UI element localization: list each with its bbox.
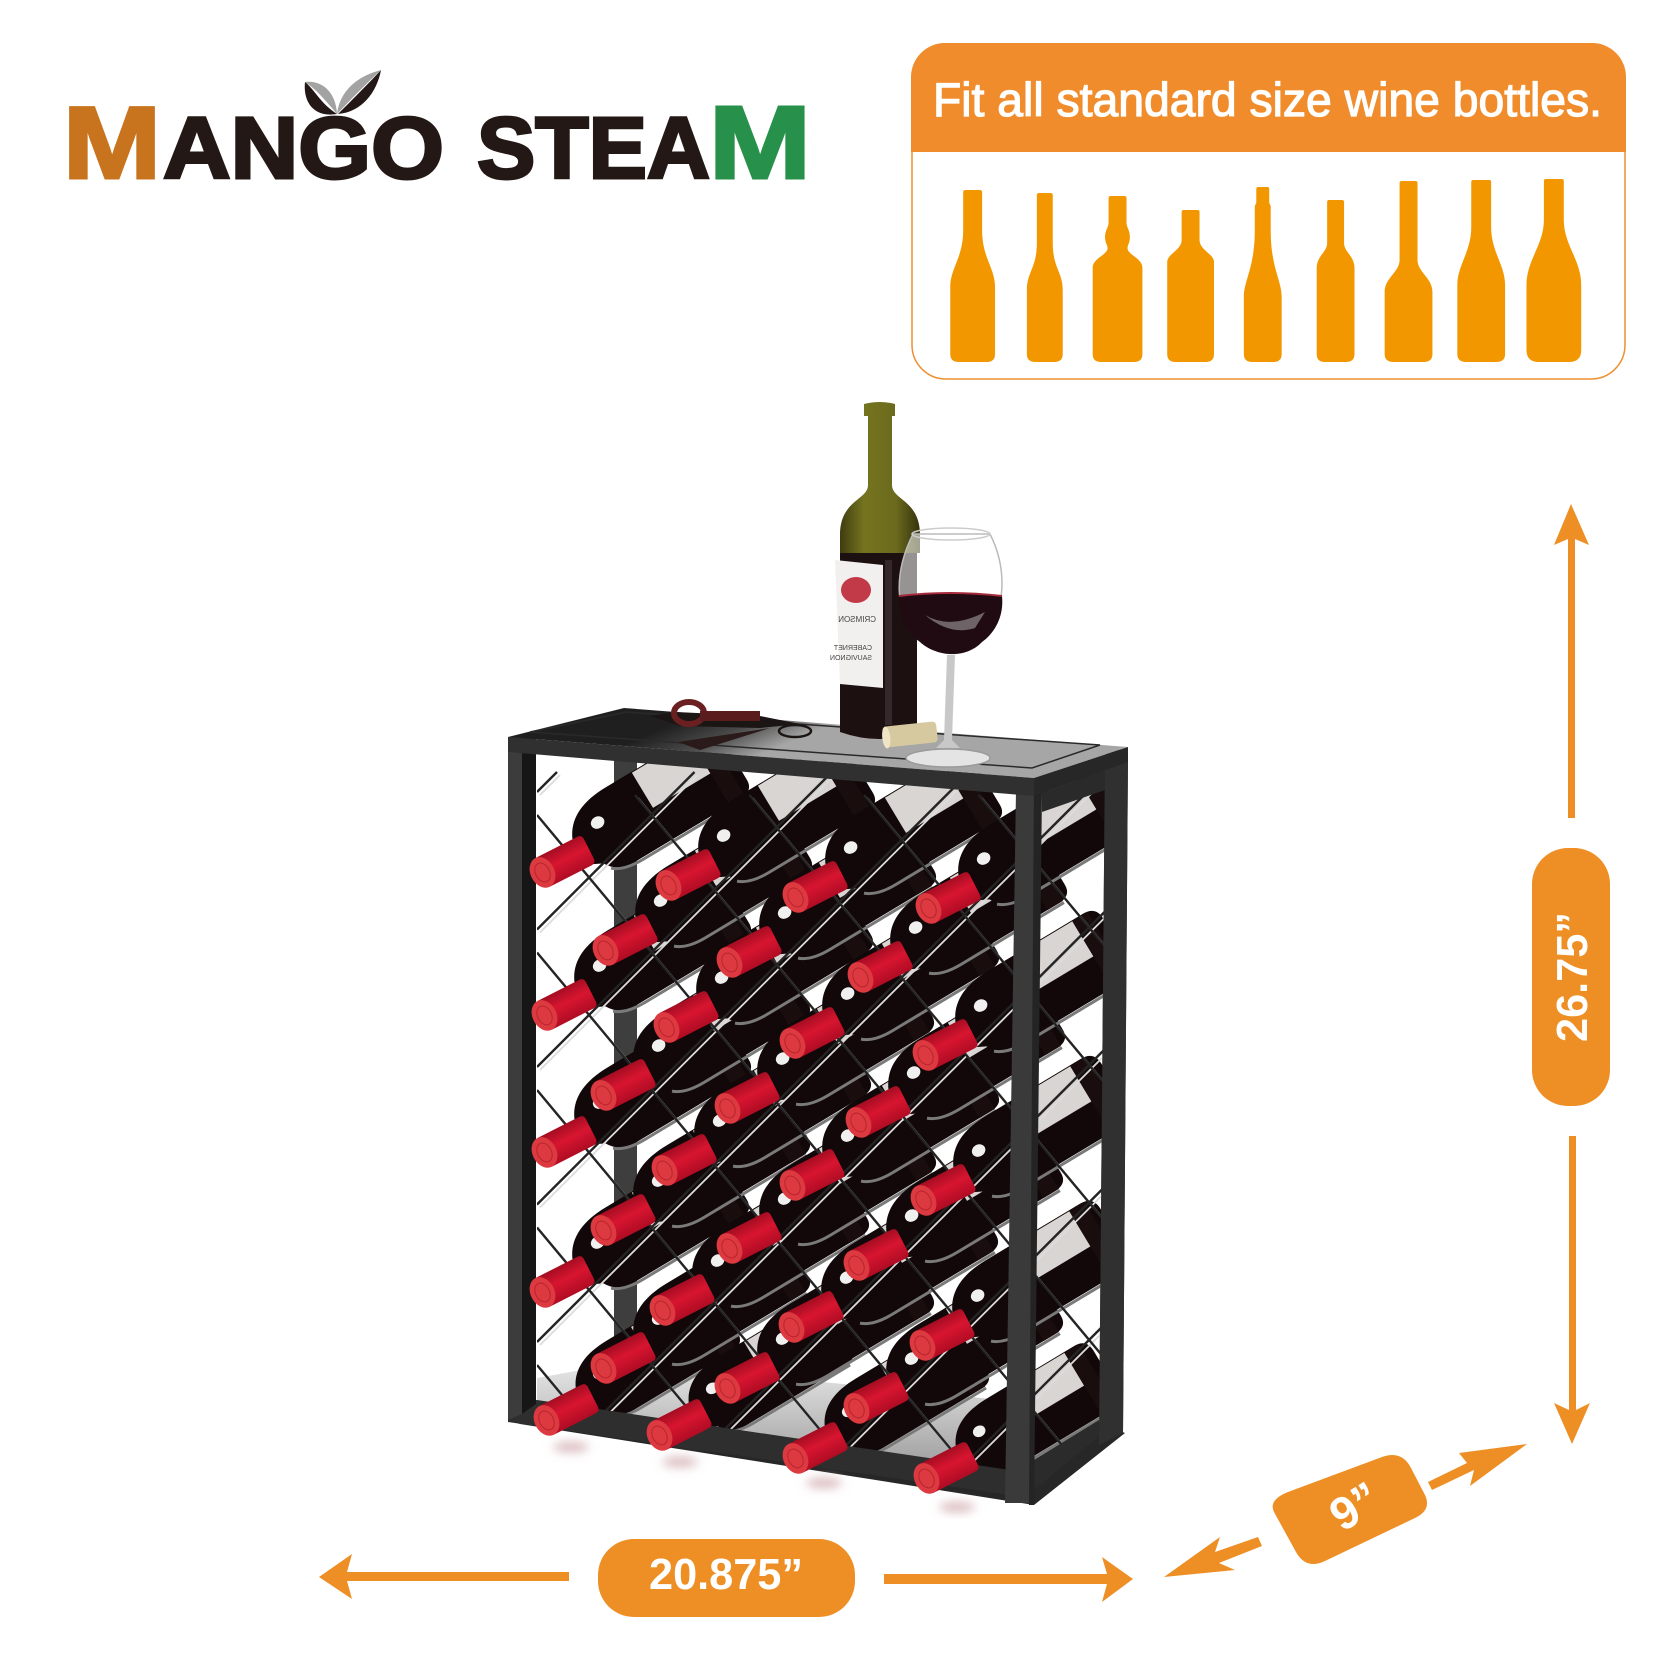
wine label xyxy=(830,560,883,688)
logo text: M xyxy=(709,85,811,200)
wine label: CRIMSON xyxy=(838,615,876,624)
upper arrow xyxy=(1428,1444,1527,1490)
cap shadows xyxy=(553,1442,975,1512)
panel outline xyxy=(912,44,1625,379)
logo text: STEA xyxy=(477,100,710,197)
right arrow xyxy=(884,1557,1133,1602)
depth label: 9” xyxy=(1320,1471,1389,1541)
logo xyxy=(63,70,811,200)
cork xyxy=(881,721,938,749)
panel: bottle sizes xyxy=(911,43,1626,379)
product: wine rack xyxy=(508,402,1141,1518)
panel heading: Fit all standard size wine bottles. xyxy=(933,73,1602,126)
bottom arrow xyxy=(1554,1136,1590,1444)
standing wine bottle xyxy=(830,402,920,739)
logo text: M xyxy=(63,86,161,200)
wine glass xyxy=(899,528,1002,767)
rack posts and top rails xyxy=(1005,750,1128,1505)
lower arrow xyxy=(1164,1537,1262,1577)
wine label: SAUVIGNON xyxy=(830,655,872,662)
logo text: ANGO xyxy=(163,100,444,197)
rack lattice xyxy=(537,772,1108,1518)
bottle silhouettes xyxy=(950,179,1581,362)
left arrow xyxy=(319,1554,569,1599)
rack rear frame xyxy=(537,760,1128,1474)
logo leaves xyxy=(305,70,381,115)
height label: 26.75” xyxy=(1548,912,1597,1042)
width pill xyxy=(598,1539,855,1617)
depth pill xyxy=(1273,1455,1427,1564)
dimension: width xyxy=(319,1539,1133,1617)
dimension: height xyxy=(1532,504,1610,1444)
width label: 20.875” xyxy=(649,1550,803,1599)
rack lower frame and left post xyxy=(508,737,1125,1505)
height pill xyxy=(1532,848,1610,1106)
logo text xyxy=(63,85,811,200)
red bottle caps xyxy=(525,835,982,1498)
rack table top xyxy=(508,708,1128,796)
panel header xyxy=(911,43,1626,152)
dimension: depth xyxy=(1164,1444,1527,1577)
corkscrew xyxy=(650,702,811,750)
bottle bodies xyxy=(572,750,1105,1470)
top arrow xyxy=(1554,504,1589,818)
wine label: CABERNET xyxy=(833,645,872,652)
